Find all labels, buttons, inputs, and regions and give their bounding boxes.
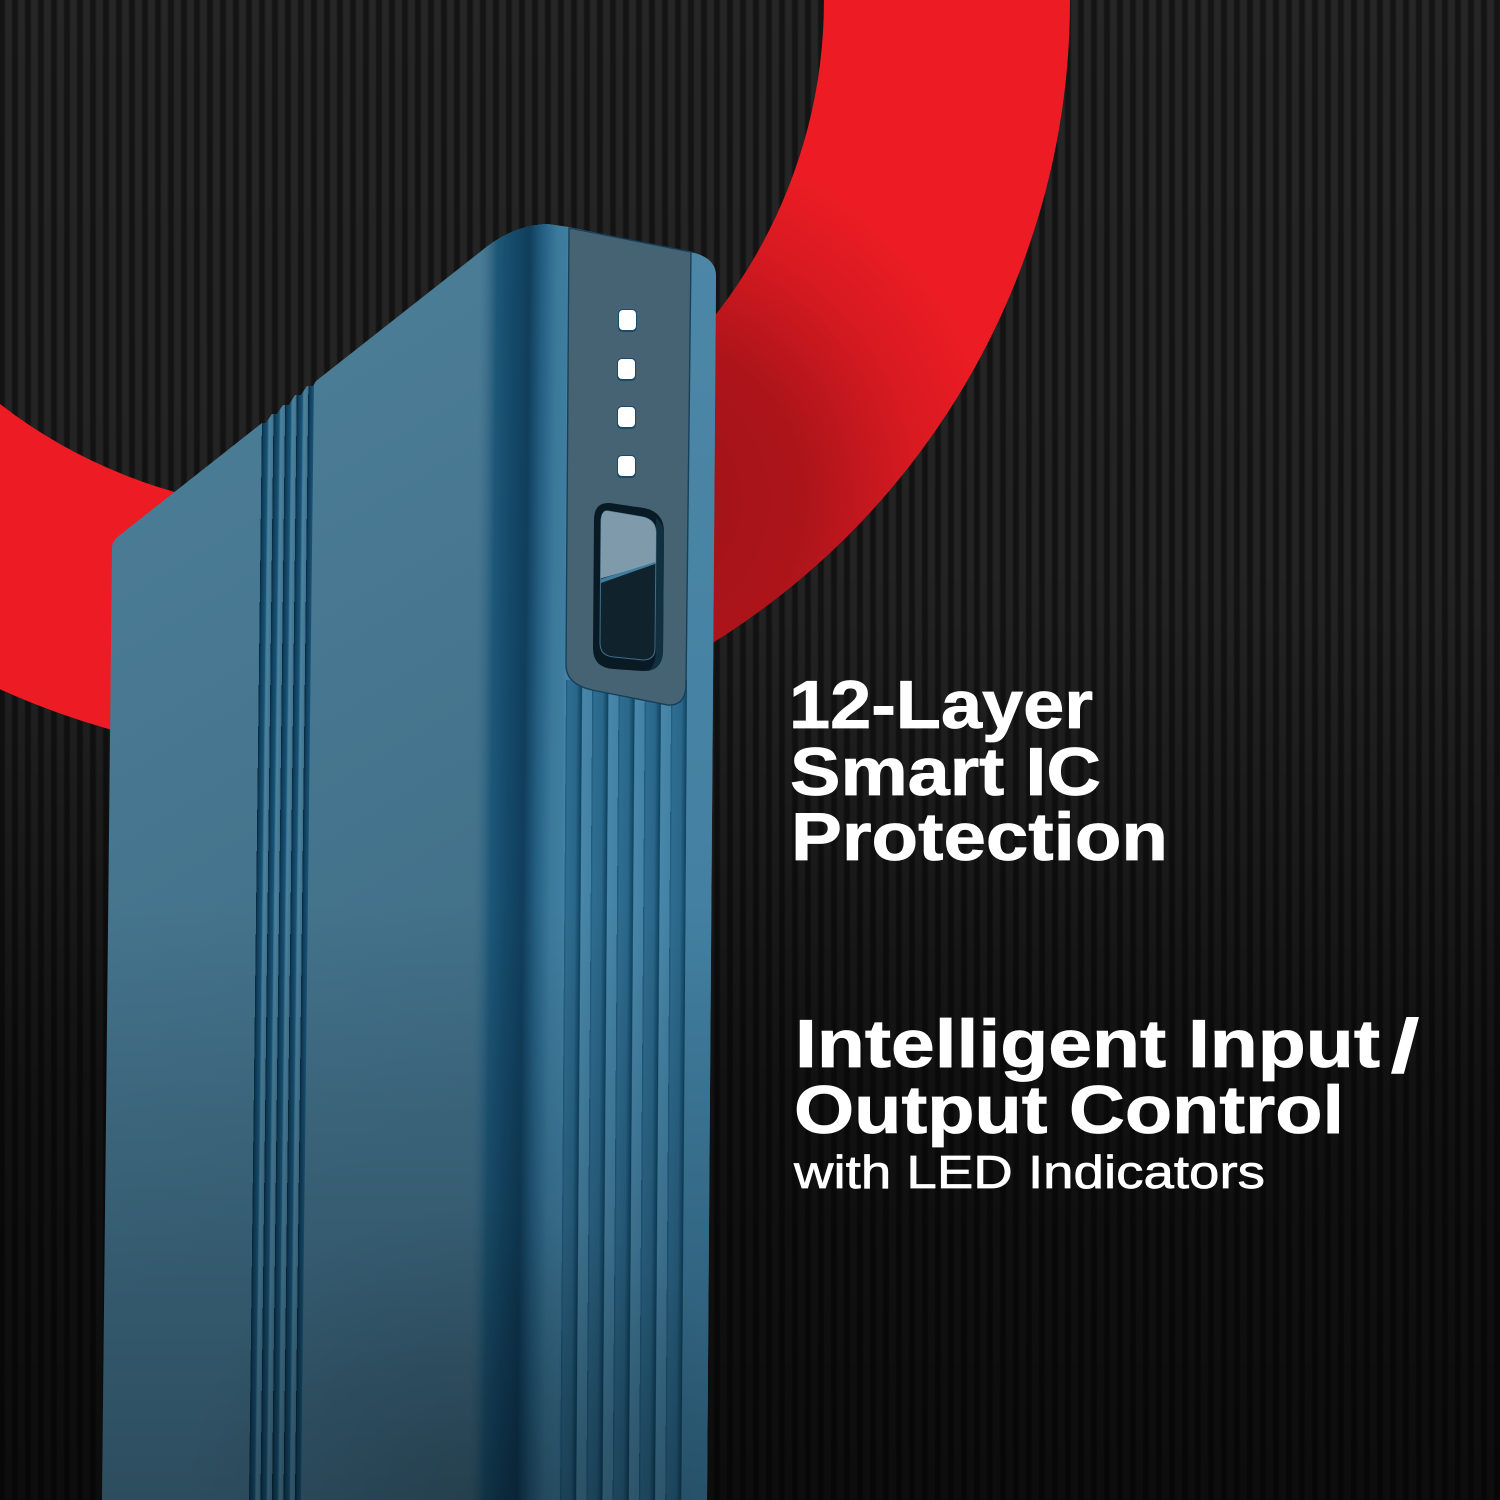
heading: 12-Layer Smart IC Protection: Protection [791,799,1168,875]
left face ribs [249,380,314,1500]
heading: Intelligent Input / Output Control with LED Indicators: Intelligent Input [795,1006,1380,1082]
heading: Intelligent Input / Output Control with LED Indicators [793,1004,1420,1198]
power button [593,503,664,671]
red ring [0,0,947,634]
heading: 12-Layer Smart IC Protection: 12-Layer [789,667,1093,743]
heading: 12-Layer Smart IC Protection: Smart IC [790,734,1101,810]
heading: Intelligent Input / Output Control with LED Indicators: Output Control [794,1072,1344,1148]
heading: Intelligent Input / Output Control with LED Indicators: with LED Indicators [793,1146,1265,1198]
power bank device [95,220,720,1500]
LED indicators [617,309,637,478]
heading: Intelligent Input / Output Control with LED Indicators: / [1390,1004,1420,1089]
side flutes [560,680,687,1500]
control panel [566,228,691,705]
device body [95,220,720,1500]
heading: 12-Layer Smart IC Protection [789,667,1168,875]
